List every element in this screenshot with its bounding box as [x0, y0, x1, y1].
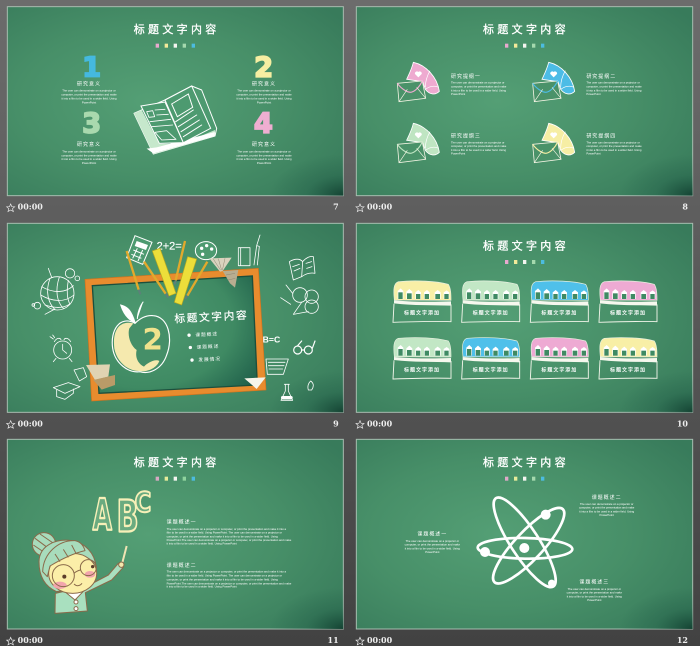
card: row 2 blue [462, 338, 520, 379]
rulers [152, 248, 197, 305]
apple: 2 [142, 322, 163, 356]
point 1 text: it into a film to be used in a wider field. Using [451, 88, 506, 92]
card: row 1 green [462, 281, 520, 322]
title: 标题文字内容 [483, 238, 569, 252]
point 4 text: 研究提纲四 [586, 133, 616, 140]
point 2 text: PowerPoint [586, 92, 601, 96]
point 1 text [61, 81, 117, 104]
icon: pink envelope [397, 62, 439, 102]
doodle: calculator [127, 236, 152, 264]
label 3: The user can demonstrate on a projector or [568, 587, 621, 591]
label 1: PowerPoint [425, 550, 440, 554]
footer: time [356, 202, 393, 212]
teacher illustration [32, 533, 127, 613]
point 3 text: it into a film to be used in a wider field. Using [61, 157, 117, 161]
text block 2: PowerPoint.The user can demonstrate on a projector or computer, or print the presentation and make [167, 581, 292, 585]
card: row 1 yellow [393, 281, 451, 322]
label 3: it into a film to be used in a wider field. Using [567, 594, 622, 598]
card: row 1 green: 标题文字添加 [473, 310, 509, 317]
ABC lettering: B [117, 491, 139, 542]
point 2 text: computer, or print the presentation and make [586, 84, 642, 88]
doodle: ice cream [281, 285, 318, 314]
folded book bottom left [86, 364, 115, 390]
folded book top [209, 258, 238, 288]
icon: yellow envelope [533, 123, 575, 163]
blackboard surface [92, 276, 257, 393]
board bullet list: 课题概述 [195, 330, 218, 339]
card: row 2 yellow [599, 338, 657, 379]
point 1 text: 研究意义 [77, 81, 101, 88]
board bullet list: 课题概述 [197, 343, 219, 351]
text block 1 [167, 518, 292, 546]
text block 2: it into a film to be used in a wider field. Using PowerPoint [167, 585, 237, 589]
slide frame [7, 439, 343, 629]
board bullet list [187, 330, 221, 364]
label 1: it into a film to be used in a wider field. Using [405, 546, 460, 550]
card: row 2 blue: 标题文字添加 [473, 366, 509, 373]
point 4 text: The user can demonstrate on a projector or [237, 149, 291, 153]
point 4 text: computer, or print the presentation and make [236, 153, 292, 157]
point 1 text: The user can demonstrate on a projector or [62, 89, 116, 93]
label 3: PowerPoint [587, 598, 602, 602]
point 1 text [451, 73, 507, 96]
point 3 text: computer, or print the presentation and make [451, 144, 507, 148]
paper plane [244, 377, 266, 389]
card: row 1 pink: 标题文字添加 [610, 310, 646, 317]
point 4 text: it into a film to be used in a wider field. Using [236, 157, 292, 161]
footer: slide number: 10 [677, 418, 688, 428]
point 3 text: The user can demonstrate on a projector or [62, 149, 116, 153]
doodle: open book [289, 256, 315, 280]
footer: time: 00:00 [18, 635, 43, 645]
title: 标题文字内容 [483, 22, 569, 36]
point 1 text: computer, or print the presentation and make [61, 93, 117, 97]
point 1 text: PowerPoint [82, 100, 96, 104]
point 4 text: The user can demonstrate on a projector or [586, 140, 640, 144]
label 3 [567, 579, 622, 602]
label 2: The user can demonstrate on a projector or [580, 502, 633, 506]
point 2 text: The user can demonstrate on a projector or [237, 89, 291, 93]
footer: slide number: 8 [682, 202, 688, 212]
card: row 1 blue [530, 281, 588, 322]
point 4 text [586, 133, 642, 156]
slide frame [356, 7, 693, 196]
doodle: rocket [308, 381, 313, 390]
point 2 text: it into a film to be used in a wider field. Using [586, 88, 642, 92]
pencils [127, 241, 207, 299]
point 3 text: PowerPoint [451, 152, 465, 156]
doodle: glasses [294, 341, 315, 354]
label 2: 课题概述二 [592, 494, 622, 501]
point 3 text: PowerPoint [82, 161, 96, 165]
footer: time: 00:00 [367, 418, 393, 428]
footer: time [356, 635, 393, 645]
text block 2: film to be used in a wider field. Using PowerPoint. The user can demonstrate on a projector or [167, 574, 282, 578]
text block 2 [167, 562, 292, 589]
point 3 text [61, 141, 117, 165]
label 3: 课题概述三 [579, 579, 609, 586]
label 2: computer, or print the presentation and make [579, 506, 635, 510]
label 1 [405, 530, 460, 554]
label 2: PowerPoint [600, 513, 614, 517]
point 4 text: PowerPoint [586, 152, 601, 156]
ABC lettering: C [135, 486, 151, 519]
point 1 text: The user can demonstrate on a projector or [451, 81, 505, 85]
number 4: 4 [254, 109, 273, 140]
card: row 2 pink: 标题文字添加 [541, 366, 577, 373]
point 3 text: computer, or print the presentation and make [61, 153, 117, 157]
footer: time [356, 418, 393, 428]
colour dots [505, 477, 544, 481]
card: row 1 blue: 标题文字添加 [541, 310, 577, 317]
doodle: equation: B=C [263, 335, 281, 345]
doodle: globe [32, 268, 80, 314]
slide 7: book with four numbered points [7, 7, 343, 212]
board bullet list: 发展情况 [198, 355, 221, 363]
point 1 text: computer, or print the presentation and make [451, 84, 507, 88]
footer: time: 00:00 [18, 418, 43, 428]
point 2 text: PowerPoint [257, 100, 271, 104]
text block 1: film to be used in a wider field. Using PowerPoint. The user can demonstrate on a projector or [167, 531, 282, 535]
ABC lettering: A [93, 490, 112, 541]
slide frame [356, 223, 693, 412]
apple [112, 302, 170, 372]
footer: slide number: 12 [677, 635, 688, 645]
footer: time: 00:00 [367, 635, 393, 645]
icon: green envelope [397, 123, 439, 163]
point 2 text [586, 73, 642, 96]
point 3 text: it into a film to be used in a wider field. Using [451, 148, 506, 152]
footer: time: 00:00 [367, 202, 393, 212]
point 2 text: it into a film to be used in a wider field. Using [236, 97, 292, 101]
label 2 [579, 494, 635, 517]
card: row 2 pink [530, 338, 588, 379]
title: 标题文字内容 [134, 455, 220, 469]
ABC lettering [93, 486, 151, 542]
colour dots [505, 44, 544, 48]
slide frame [356, 439, 693, 629]
card: row 2 green [393, 338, 451, 379]
point 4 text: 研究意义 [252, 141, 276, 148]
atom icon [477, 491, 573, 594]
text block 1: computer, or print the presentation and make it into a film to be used in a wider field. Using [167, 534, 278, 538]
text block 1: PowerPoint.The user can demonstrate on a projector or computer, or print the presentation and make [167, 538, 292, 542]
number 2: 2 [254, 52, 273, 83]
number 3: 3 [82, 109, 101, 140]
text block 2: computer, or print the presentation and make it into a film to be used in a wider field. Using [167, 578, 278, 582]
doodle: graduation cap [53, 368, 87, 399]
card: row 2 yellow: 标题文字添加 [610, 366, 646, 373]
point 4 text: computer, or print the presentation and make [586, 144, 642, 148]
footer: slide number: 9 [333, 418, 339, 428]
doodle: notebook and brush [238, 235, 260, 266]
point 2 text [236, 81, 292, 104]
icon: open book [134, 86, 217, 154]
point 2 text: The user can demonstrate on a projector or [586, 81, 640, 85]
point 3 text: 研究提纲三 [451, 133, 481, 140]
footer: time [7, 418, 43, 428]
title: 标题文字内容 [134, 22, 220, 36]
point 2 text: computer, or print the presentation and make [236, 93, 292, 97]
colour dots [156, 477, 195, 481]
point 1 text: PowerPoint [451, 92, 465, 96]
slide 12: atom diagram [356, 439, 693, 645]
point 1 text: 研究提纲一 [451, 73, 481, 80]
card: row 1 pink [599, 281, 657, 322]
number 1: 1 [82, 52, 101, 83]
point 4 text: it into a film to be used in a wider field. Using [586, 148, 642, 152]
board title: 标题文字内容 [174, 309, 249, 326]
colour dots [505, 260, 544, 264]
point 3 text: The user can demonstrate on a projector or [451, 140, 505, 144]
slide 10: eight labelled cards [356, 223, 693, 428]
point 4 text: PowerPoint [257, 161, 271, 165]
title: 标题文字内容 [483, 455, 569, 469]
icon: blue envelope [533, 62, 575, 102]
footer: time: 00:00 [18, 202, 43, 212]
footer: time [7, 635, 43, 645]
doodle: palette [195, 242, 217, 260]
doodle: flask [281, 384, 293, 400]
label 1: computer, or print the presentation and make [405, 543, 460, 547]
text block 1: it into a film to be used in a wider field. Using PowerPoint [167, 542, 237, 546]
slide 9: framed blackboard with doodles [7, 223, 343, 428]
footer: slide number: 7 [333, 202, 339, 212]
point 4 text [236, 141, 292, 165]
doodle: alarm clock [50, 335, 72, 362]
slide 11: teacher and ABC [7, 439, 343, 645]
card: row 1 yellow: 标题文字添加 [404, 310, 440, 317]
colour dots [156, 44, 195, 48]
slide frame [7, 7, 343, 196]
card: row 2 green: 标题文字添加 [404, 366, 440, 373]
text block 1: The user can demonstrate on a projector or computer, or print the presentation and make it into a [167, 527, 286, 531]
blackboard frame [85, 268, 266, 401]
footer: time [7, 202, 43, 212]
text block 2: The user can demonstrate on a projector or computer, or print the presentation and make it into a [167, 570, 286, 574]
text block 2: 课题概述二 [167, 562, 197, 569]
point 3 text [451, 133, 507, 156]
point 2 text: 研究意义 [252, 81, 276, 88]
slide 8: four envelope points [356, 7, 693, 212]
footer: slide number: 11 [328, 635, 339, 645]
slide frame [7, 223, 343, 412]
label 3: computer, or print the presentation and make [567, 591, 622, 595]
point 3 text: 研究意义 [77, 141, 101, 148]
doodle: sum: 2+2= [157, 241, 182, 253]
doodle: keyboard [266, 359, 288, 374]
text block 1: 课题概述一 [167, 518, 197, 525]
label 2: it into a film to be used in a wider field. Using [579, 509, 635, 513]
label 1: The user can demonstrate on a projector or [406, 539, 459, 543]
label 1: 课题概述一 [417, 530, 447, 537]
point 1 text: it into a film to be used in a wider field. Using [61, 97, 117, 101]
point 2 text: 研究提纲二 [586, 73, 616, 80]
